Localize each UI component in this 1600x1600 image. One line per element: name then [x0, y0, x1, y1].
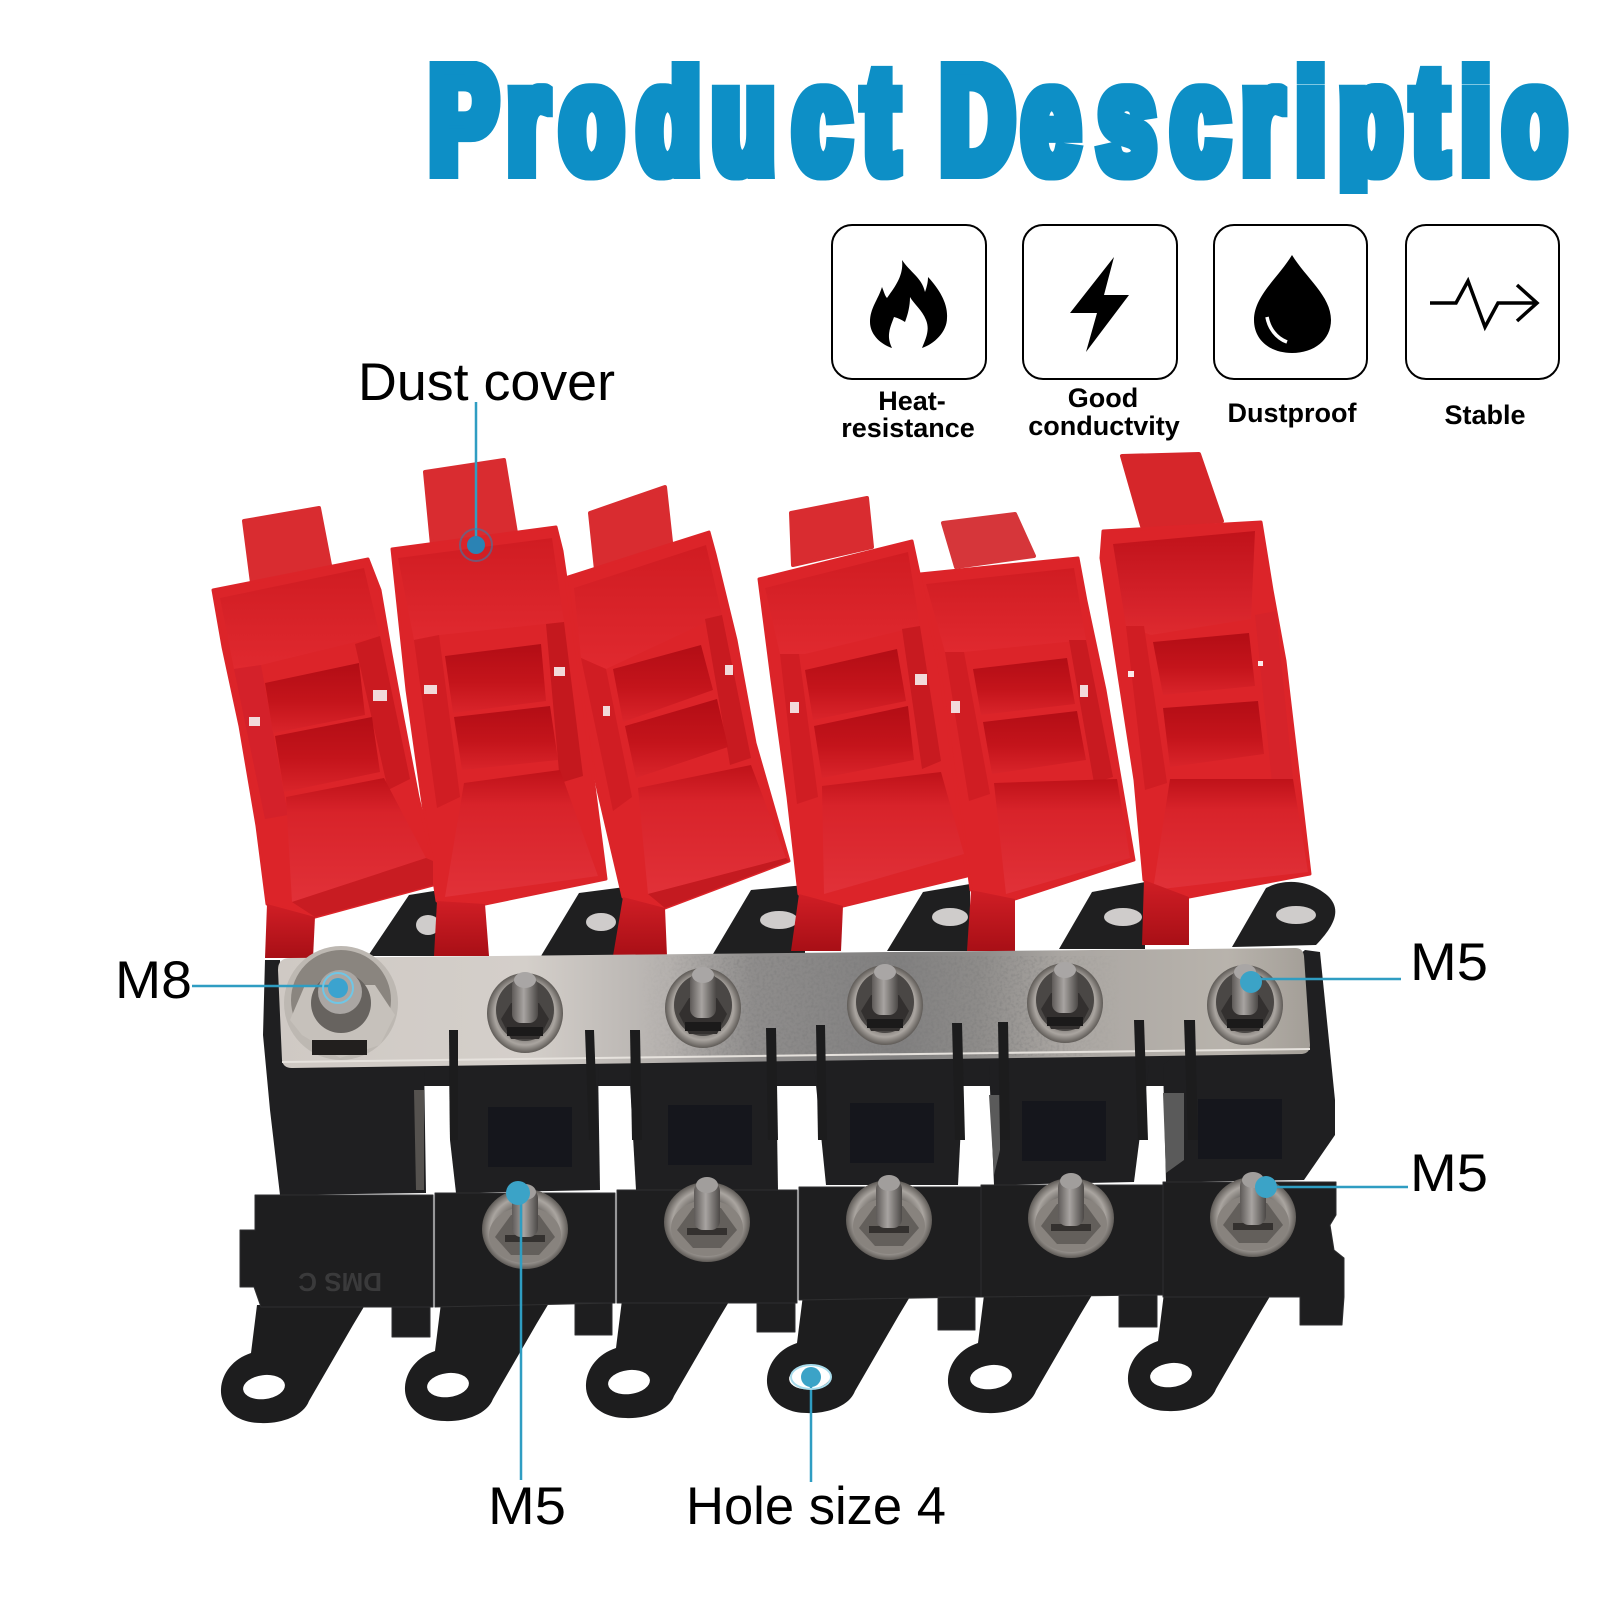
- dust cover 4: [759, 498, 967, 951]
- lower stud 4: [1028, 1173, 1114, 1258]
- foot 2: [405, 1303, 549, 1421]
- callout: M5 lower right: [1255, 1144, 1488, 1203]
- feature icons row: [832, 225, 1559, 443]
- upper stud 5: [1027, 962, 1103, 1043]
- callout: hole size: [686, 1365, 946, 1536]
- terminal blocks: [240, 1182, 1344, 1337]
- label: heat-resistance: resistance: [841, 413, 975, 443]
- icon: good conductivity bolt: [1023, 225, 1177, 379]
- rear mounting tabs: [368, 882, 1335, 956]
- lower stud 5: [1210, 1172, 1296, 1257]
- lower stud 3: [846, 1175, 932, 1260]
- icon: stable pulse arrow: [1406, 225, 1559, 379]
- callout: M8: M8: [115, 951, 192, 1010]
- molded DMS C marking: DMS C: [298, 1267, 382, 1297]
- label: stable: Stable: [1444, 400, 1526, 430]
- dust cover 2: [392, 460, 606, 956]
- callout: M5 bottom: M5: [488, 1477, 566, 1536]
- icon: heat resistance flame: [832, 225, 986, 379]
- dust cover 1: [213, 508, 433, 958]
- lower stud 2: [664, 1177, 750, 1262]
- label: good conductvity: conductvity: [1028, 411, 1180, 441]
- foot 6: [1128, 1293, 1272, 1411]
- callout: M8: [115, 951, 353, 1010]
- mounting feet: [221, 1293, 1272, 1423]
- upper M5 studs: [487, 972, 563, 1053]
- vertical clip rails: [449, 1020, 1198, 1140]
- callout: M5 upper right: M5: [1410, 933, 1488, 992]
- callout: dust cover: [358, 353, 615, 561]
- label: good conductvity: Good: [1068, 383, 1138, 413]
- foot 3: [586, 1300, 730, 1418]
- dust cover 6: [1101, 454, 1310, 945]
- title: Product Descriptio: [430, 35, 1565, 205]
- lower M5 studs: [482, 1172, 1296, 1269]
- M8 terminal: [284, 946, 398, 1060]
- callout: M5 upper right: [1240, 933, 1488, 993]
- dust cover 3: [568, 487, 789, 956]
- product photo: fuse block with dust covers: [213, 454, 1344, 1423]
- label: heat-resistance: Heat-: [878, 386, 946, 416]
- bus bar: [278, 946, 1310, 1068]
- foot 4: [767, 1295, 911, 1413]
- upper stud 4: [847, 964, 923, 1045]
- dust cover 5: [920, 514, 1134, 951]
- icon: dustproof drop: [1214, 225, 1367, 379]
- label: dustproof: Dustproof: [1228, 398, 1357, 428]
- upper stud 3: [665, 967, 741, 1048]
- black base: arms beneath the bus bar: [263, 950, 1335, 1195]
- callout: dust cover: Dust cover: [358, 353, 615, 412]
- foot 5: [948, 1295, 1092, 1413]
- callout: M5 lower right: M5: [1410, 1144, 1488, 1203]
- upper stud 6: [1207, 964, 1283, 1045]
- callout: M5 bottom: [488, 1181, 566, 1536]
- callout: hole size: Hole size 4: [686, 1477, 946, 1536]
